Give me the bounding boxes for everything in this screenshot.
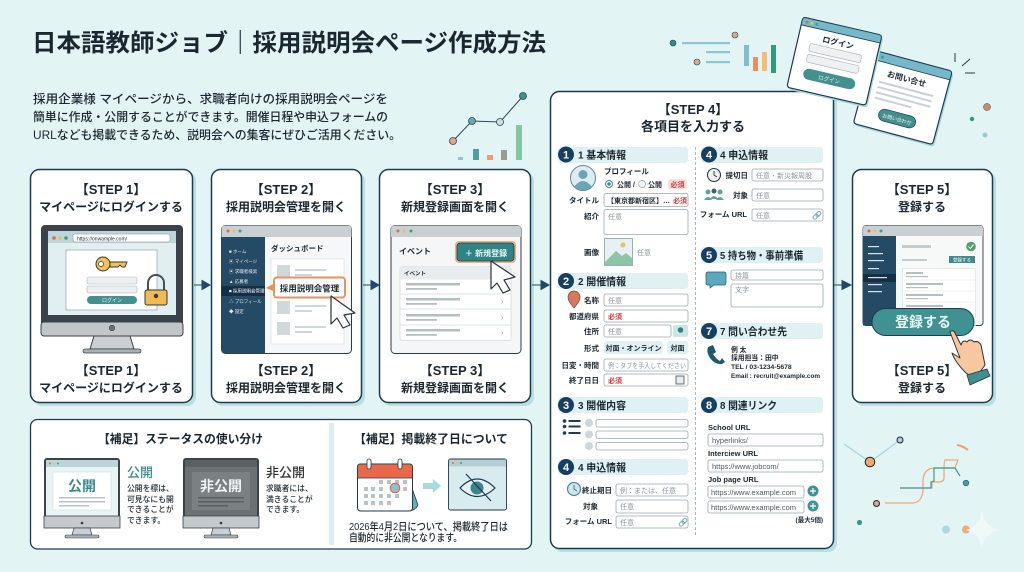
- section 8 links: https://www.jobcom/: [712, 462, 780, 471]
- section 2 event info: 例：タブを手入してください: [608, 361, 686, 370]
- section 8 links: (最大5個): [796, 515, 823, 524]
- icon: phone: [707, 345, 725, 364]
- intro text: URLなども掲載できるため、説明会への集客にぜひご活用ください。: [33, 127, 401, 142]
- section 8 links: [701, 397, 823, 524]
- step 2 dashboard illustration: ▣ マイページ: [229, 259, 258, 265]
- section 5 belongings: [701, 247, 823, 307]
- section 4 application left: 対象: [583, 501, 598, 511]
- step 5 heading: 【STEP 5】: [887, 182, 957, 197]
- decoration: sparks and dots: [955, 53, 990, 138]
- section 1 basic info: 公開 /: [617, 180, 635, 189]
- section 1 basic info: 【東京都新宿区】…: [607, 196, 670, 205]
- section 4 application right: 任意: [756, 191, 770, 200]
- public description: 公開を標は、: [127, 483, 174, 493]
- floating window: contact: お問い合わせ: [881, 112, 912, 127]
- step 2 caption: 【STEP 2】: [251, 363, 321, 378]
- step 1 caption: [39, 363, 183, 395]
- section 4 application left: [558, 459, 688, 528]
- icon: pointing hand: [950, 331, 990, 385]
- section 4 application left: 任意: [620, 502, 634, 511]
- section 1 basic info: [558, 146, 688, 266]
- section 1 basic info: 1: [563, 150, 569, 162]
- floating window: contact: お問い合せ: [886, 69, 927, 89]
- panel: step 2: [212, 170, 365, 406]
- section 3 content: 3 開催内容: [578, 399, 626, 412]
- section 2 event info: 任意: [608, 327, 622, 336]
- step 2 dashboard illustration: ◆ 設定: [229, 309, 244, 315]
- section 1 basic info: 公開: [648, 180, 662, 189]
- end date note: 自動的に非公開となります。: [349, 531, 462, 544]
- section 4 application left: 4 申込情報: [578, 461, 626, 474]
- step 5 heading: 登録する: [898, 199, 946, 214]
- section 8 links: https://www.example.com: [711, 488, 796, 497]
- section 1 basic info: 任意: [637, 248, 651, 257]
- private description: 満きることが: [266, 494, 313, 504]
- section 4 application left: 🔗: [678, 517, 688, 527]
- section 1 basic info: プロフィール: [604, 167, 649, 176]
- section 8 links: Job page URL: [708, 475, 759, 484]
- section 7 contact: 7 問い合わせ先: [720, 325, 787, 338]
- section 5 belongings: 文字: [735, 285, 749, 294]
- section 2 event info: 形式: [584, 343, 599, 353]
- step 2 heading: 採用説明会管理を開く: [226, 199, 346, 214]
- section 4 application right: 4 申込情報: [720, 148, 768, 162]
- icon: cursor: [331, 296, 355, 328]
- public description: 公開: [127, 465, 153, 480]
- step 2 heading: [226, 182, 346, 214]
- section 3 content: 3: [563, 400, 569, 412]
- section 2 event info: 必須: [608, 312, 622, 321]
- section 2 event info: 2 開催情報: [578, 275, 626, 288]
- step 1 caption: マイページにログインする: [39, 380, 183, 395]
- icon: clock: [708, 168, 720, 182]
- heading: status usage: 【補足】ステータスの使い分け: [98, 431, 263, 446]
- icon: key: [96, 257, 127, 271]
- step 1 monitor illustration: [41, 225, 183, 353]
- step 1 heading: マイページにログインする: [39, 199, 183, 214]
- section 4 application left: 任意: [620, 518, 634, 527]
- arrow 4: [834, 280, 851, 290]
- floating window: login: ログイン: [817, 73, 841, 86]
- icon: list: [563, 419, 580, 435]
- callout: 採用説明会管理: [280, 284, 340, 294]
- end date note: 2026年4月2日について、掲載終了日は: [349, 520, 508, 533]
- monitor: private: [183, 458, 259, 538]
- section 8 links: 8 関連リンク: [720, 399, 777, 412]
- intro text: 採用企業様 マイページから、求職者向けの採用説明会ページを: [33, 91, 388, 106]
- step 2 dashboard illustration: ダッシュボード: [271, 243, 324, 253]
- public description: できることが: [127, 504, 174, 514]
- decoration: bottom right network: [844, 437, 999, 548]
- monitor: public: 公開: [68, 478, 96, 494]
- section 1 basic info: タイトル: [569, 195, 599, 205]
- step 2 dashboard illustration: △ プロフィール: [229, 298, 262, 305]
- title: 日本語教師ジョブ｜採用説明会ページ作成方法: [32, 29, 546, 57]
- step 4 heading: 各項目を入力する: [641, 119, 745, 134]
- section 4 application left: 終止期日: [582, 485, 612, 495]
- step 2 dashboard illustration: ■ 採用説明会管理: [229, 288, 265, 294]
- floating window: login: [786, 17, 884, 108]
- section 3 content: [558, 397, 688, 450]
- section 2 event info: 必須: [608, 376, 622, 385]
- step 1 monitor illustration: https://onwample.com/: [77, 236, 128, 242]
- step 3 caption: [401, 363, 509, 395]
- step 5 caption: [887, 363, 957, 395]
- step 3 screen illustration: ›: [501, 299, 504, 306]
- section 4 application left: フォーム URL: [565, 517, 612, 526]
- step 1 caption: 【STEP 1】: [76, 363, 146, 378]
- section 4 application right: 任意・新災報周股: [756, 171, 812, 180]
- section 1 basic info: 紹介: [584, 211, 599, 221]
- icon: padlock: [145, 275, 167, 305]
- icon: map pin: [568, 291, 580, 308]
- section 4 application right: フォーム URL: [700, 210, 747, 219]
- arrow 3: [532, 280, 549, 290]
- panel: supplementary notes: [30, 420, 532, 549]
- step 3 caption: 新規登録画面を開く: [401, 380, 509, 395]
- section 4 application right: 🔗: [812, 210, 822, 220]
- section 4 application right: 任意: [756, 211, 770, 220]
- icon: avatar: [570, 166, 596, 190]
- step 3 heading: 【STEP 3】: [420, 182, 490, 197]
- floating window: login: ログイン: [821, 34, 855, 51]
- section 7 contact: 例 太: [731, 345, 747, 354]
- section 7 contact: 7: [706, 326, 712, 338]
- end date note: [349, 520, 508, 544]
- icon: hidden page: [448, 459, 506, 510]
- step 5 button: 登録する: [895, 314, 951, 330]
- panel: step 1: [30, 170, 196, 406]
- public description: できます。: [127, 516, 165, 525]
- monitor: private: 非公開: [200, 478, 242, 494]
- section 5 belongings: 5 持ち物・事前準備: [720, 249, 803, 262]
- step 3 heading: [401, 182, 509, 214]
- section 2 event info: 名称: [584, 295, 599, 305]
- arrow: calendar to hidden: [423, 479, 441, 493]
- step 2 dashboard illustration: ▣ 求職者検索: [229, 268, 258, 275]
- step 2 dashboard illustration: ▲ 応募者: [229, 278, 249, 285]
- step 1 heading: 【STEP 1】: [76, 182, 146, 197]
- step 4 heading: [641, 102, 745, 134]
- step 3 heading: 新規登録画面を開く: [401, 199, 509, 214]
- step 2 caption: [226, 363, 346, 395]
- section 2 event info: 2: [563, 276, 569, 288]
- panel: step 5: [852, 170, 996, 406]
- section 1 basic info: 必須: [670, 180, 684, 189]
- divider: [694, 147, 696, 535]
- private description: [266, 465, 313, 514]
- monitor: public: [44, 458, 120, 538]
- section 1 basic info: 任意: [608, 212, 622, 221]
- section 2 event info: 都道府県: [569, 311, 599, 321]
- step 5 caption: 登録する: [898, 380, 946, 395]
- step 3 screen illustration: イベント: [404, 270, 426, 278]
- floating window: contact: [853, 50, 954, 147]
- section 2 event info: 対面: [670, 344, 684, 352]
- step 3 screen illustration: [391, 226, 521, 354]
- decoration: top bars and dots: [670, 32, 776, 73]
- section 2 event info: 対面・オンライン: [606, 344, 662, 352]
- step 5 button: [872, 308, 974, 336]
- private description: 非公開: [266, 465, 305, 480]
- step 3 screen illustration: ›: [501, 330, 504, 337]
- section 8 links: Interciew URL: [708, 449, 758, 458]
- section 5 belongings: 持篇: [735, 271, 749, 280]
- section 7 contact: 採用担当：田中: [731, 353, 779, 362]
- icon: image placeholder: [604, 238, 632, 266]
- section 2 event info: 任意: [608, 296, 622, 305]
- arrow 2: [363, 280, 379, 290]
- private description: 求職者には、: [266, 483, 313, 493]
- arrow 1: [194, 280, 210, 290]
- section 4 application right: 提切日: [726, 170, 748, 180]
- section 8 links: 8: [706, 400, 712, 412]
- section 2 event info: [558, 273, 688, 386]
- section 2 event info: 住所: [584, 326, 599, 336]
- section 8 links: https://www.example.com: [711, 503, 796, 512]
- section 8 links: School URL: [708, 423, 751, 432]
- icon: chat bubble: [706, 272, 726, 288]
- section 5 belongings: 5: [706, 250, 712, 262]
- intro text: [33, 91, 401, 142]
- step 2 dashboard illustration: ■ ホーム: [229, 249, 247, 254]
- step 2 caption: 採用説明会管理を開く: [226, 380, 346, 395]
- section 7 contact: [701, 323, 823, 380]
- section 1 basic info: 1 基本情報: [578, 148, 626, 162]
- section 2 event info: 日変・時間: [562, 360, 599, 370]
- intro text: 簡単に作成・公開することができます。開催日程や申込フォームの: [33, 109, 388, 124]
- section 4 application right: 対象: [733, 190, 748, 200]
- button: new registration: ＋ 新規登録: [465, 248, 507, 258]
- panel: step 3: [380, 170, 534, 406]
- step 3 screen illustration: ›: [501, 315, 504, 322]
- heading: end date: 【補足】掲載終了日について: [354, 431, 508, 446]
- step 5 caption: 【STEP 5】: [887, 363, 957, 378]
- step 1 monitor illustration: ログイン: [102, 297, 122, 304]
- public description: [127, 465, 174, 525]
- step 2 heading: 【STEP 2】: [251, 182, 321, 197]
- step 1 heading: [39, 182, 183, 214]
- section 8 links: hyperlinks/: [712, 436, 749, 445]
- decoration: line chart: [450, 92, 526, 160]
- icon: calendar: [358, 459, 418, 511]
- icon: people: [704, 188, 724, 200]
- panel: step 4: [550, 92, 837, 552]
- section 1 basic info: 画像: [584, 247, 599, 257]
- step 2 dashboard illustration: [222, 226, 355, 354]
- step 3 screen illustration: イベント: [399, 247, 431, 256]
- section 4 application right: 4: [706, 150, 713, 162]
- step 5 screen illustration: [863, 226, 983, 326]
- section 1 basic info: 必須: [673, 196, 687, 205]
- section 4 application left: 4: [563, 462, 570, 474]
- section 2 event info: 終了日日: [569, 375, 599, 385]
- section 7 contact: TEL / 03-1234-5678: [731, 364, 792, 371]
- section 4 application right: [700, 146, 823, 221]
- public description: 可見なにも開: [127, 495, 174, 504]
- step 5 screen illustration: 登録する: [953, 256, 971, 264]
- step 3 caption: 【STEP 3】: [420, 363, 490, 378]
- section 7 contact: Email : recruit@example.com: [731, 373, 820, 380]
- private description: できます。: [266, 505, 304, 514]
- step 4 heading: 【STEP 4】: [658, 102, 728, 117]
- icon: cursor: [491, 261, 515, 293]
- step 5 heading: [887, 182, 957, 214]
- icon: clock: [568, 482, 580, 496]
- section 4 application left: 例：または、任意: [620, 486, 676, 495]
- vertical divider band: [329, 423, 334, 545]
